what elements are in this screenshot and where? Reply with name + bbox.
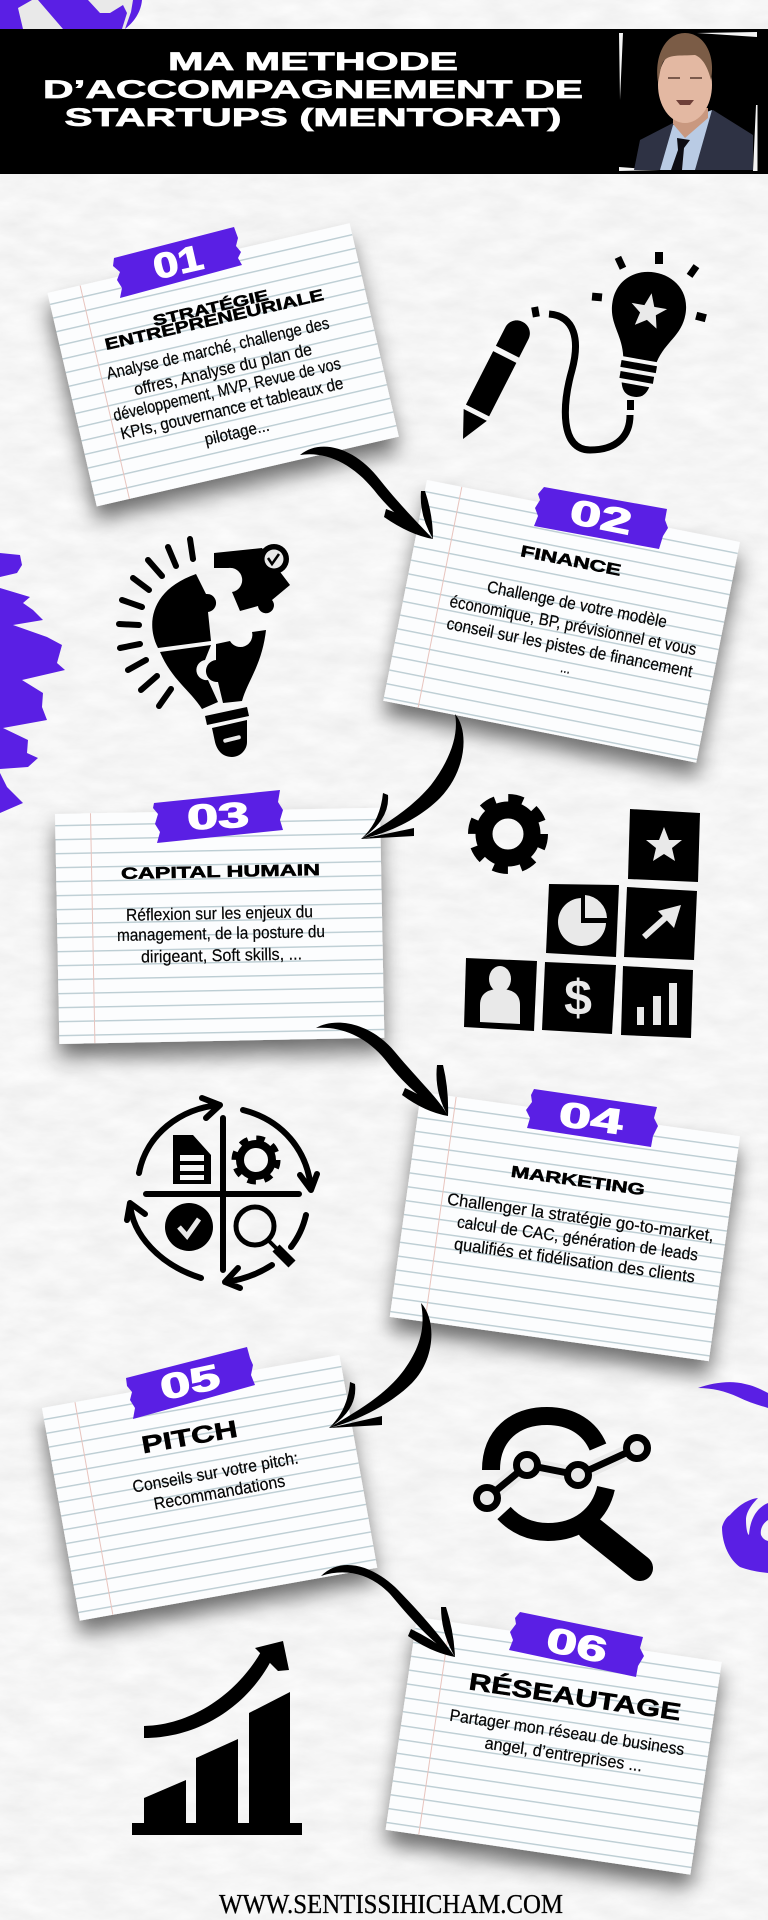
step 01 tag: 01 bbox=[149, 238, 207, 287]
purple brush: left edge bbox=[0, 553, 65, 813]
arrow 3 to 4 bbox=[316, 1023, 448, 1116]
icon: magnifier with line chart bbox=[476, 1416, 648, 1568]
step 01 text: pilotage... bbox=[203, 416, 271, 449]
step 04 text bbox=[446, 1164, 715, 1287]
step 05 tag: 05 bbox=[157, 1357, 224, 1408]
note card 6 bbox=[386, 1617, 722, 1875]
purple brush: top left bbox=[0, 0, 142, 29]
step 04 text: calcul de CAC, génération de leads bbox=[456, 1212, 699, 1265]
step 06 tag bbox=[509, 1612, 644, 1677]
step 04 tag: 04 bbox=[557, 1095, 626, 1142]
step 02 text: économique, BP, prévisionnel et vous bbox=[448, 592, 698, 659]
step 01 text: ENTREPRENEURIALE bbox=[103, 287, 326, 354]
step 03 text: Réflexion sur les enjeux du bbox=[126, 902, 313, 925]
title: D’ACCOMPAGNEMENT DE bbox=[43, 76, 583, 104]
step 05 text: PITCH bbox=[139, 1416, 240, 1459]
arrow 5 to 6 bbox=[321, 1565, 455, 1657]
square: person bbox=[464, 958, 537, 1031]
note card 1 bbox=[48, 223, 399, 506]
header banner bbox=[0, 29, 768, 174]
step 03 text: management, de la posture du bbox=[117, 922, 325, 945]
step 01 text: développement, MVP, Revue de vos bbox=[111, 354, 343, 425]
note card 5 bbox=[42, 1355, 377, 1621]
title bbox=[43, 48, 583, 132]
step 01 text: STRATÉGIE bbox=[151, 287, 270, 330]
purple brush: right edge bbox=[698, 1382, 768, 1573]
title: STARTUPS (MENTORAT) bbox=[64, 104, 562, 132]
square: dollar: $ bbox=[564, 970, 592, 1026]
icon: business squares grid bbox=[464, 809, 700, 1038]
step 02 text: conseil sur les pistes de financement bbox=[445, 614, 694, 681]
square: dollar bbox=[542, 962, 616, 1034]
step 05 text: Conseils sur votre pitch: bbox=[131, 1448, 300, 1497]
step 04 text: qualifiés et fidélisation des clients bbox=[453, 1234, 696, 1287]
step 02 text: Challenge de votre modèle bbox=[485, 577, 669, 632]
square: pie chart bbox=[546, 884, 619, 957]
icon: growth bar chart bbox=[132, 1641, 302, 1835]
step 03 tag bbox=[153, 790, 283, 843]
square: star bbox=[628, 809, 700, 882]
step 01 text bbox=[103, 287, 345, 449]
arrow 1 to 2 bbox=[300, 447, 433, 539]
portrait photo bbox=[619, 32, 758, 171]
step 06 tag: 06 bbox=[543, 1620, 611, 1671]
note card 3 bbox=[55, 808, 384, 1044]
step 03 text bbox=[117, 862, 325, 967]
step 05 text: Recommandations bbox=[152, 1471, 287, 1514]
step 06 text bbox=[448, 1668, 686, 1776]
title: MA METHODE bbox=[168, 48, 458, 76]
arrow 4 to 5 bbox=[329, 1303, 431, 1428]
arrow 2 to 3 bbox=[361, 714, 464, 839]
square: growth arrow bbox=[624, 887, 697, 960]
icon: pencil and idea bulb bbox=[451, 252, 707, 450]
icon: process cycle bbox=[127, 1098, 317, 1288]
note card 4 bbox=[390, 1092, 740, 1361]
step 06 text: RÉSEAUTAGE bbox=[467, 1668, 683, 1726]
step 01 text: offres, Analyse du plan de bbox=[132, 340, 314, 399]
step 02 text bbox=[445, 543, 698, 681]
icon: gear bbox=[472, 798, 544, 870]
note card 2 bbox=[383, 480, 740, 763]
step 03 text: CAPITAL HUMAIN bbox=[121, 862, 320, 883]
step 03 text: dirigeant, Soft skills, ... bbox=[141, 944, 302, 967]
step 04 text: Challenger la stratégie go-to-market, bbox=[446, 1190, 715, 1245]
square: bars bbox=[621, 966, 693, 1038]
step 02 text: FINANCE bbox=[519, 543, 623, 580]
step 01 tag bbox=[113, 227, 242, 298]
step 01 text: Analyse de marché, challenge des bbox=[105, 314, 331, 383]
step 06 text: Partager mon réseau de business bbox=[448, 1706, 686, 1759]
step 04 text: MARKETING bbox=[510, 1164, 646, 1199]
step 01 text: KPIs, gouvernance et tableaux de bbox=[119, 374, 345, 443]
step 05 text bbox=[131, 1416, 300, 1514]
step 04 tag bbox=[526, 1089, 658, 1147]
footer website: WWW.SENTISSIHICHAM.COM bbox=[219, 1889, 563, 1919]
step 02 tag: 02 bbox=[567, 492, 635, 543]
step 06 text: angel, d’entreprises ... bbox=[484, 1733, 644, 1776]
step 02 text: ... bbox=[559, 657, 572, 678]
step 02 tag bbox=[534, 487, 668, 549]
step 03 tag: 03 bbox=[186, 795, 250, 838]
step 05 tag bbox=[126, 1347, 255, 1419]
icon: puzzle light bulb bbox=[119, 539, 290, 757]
